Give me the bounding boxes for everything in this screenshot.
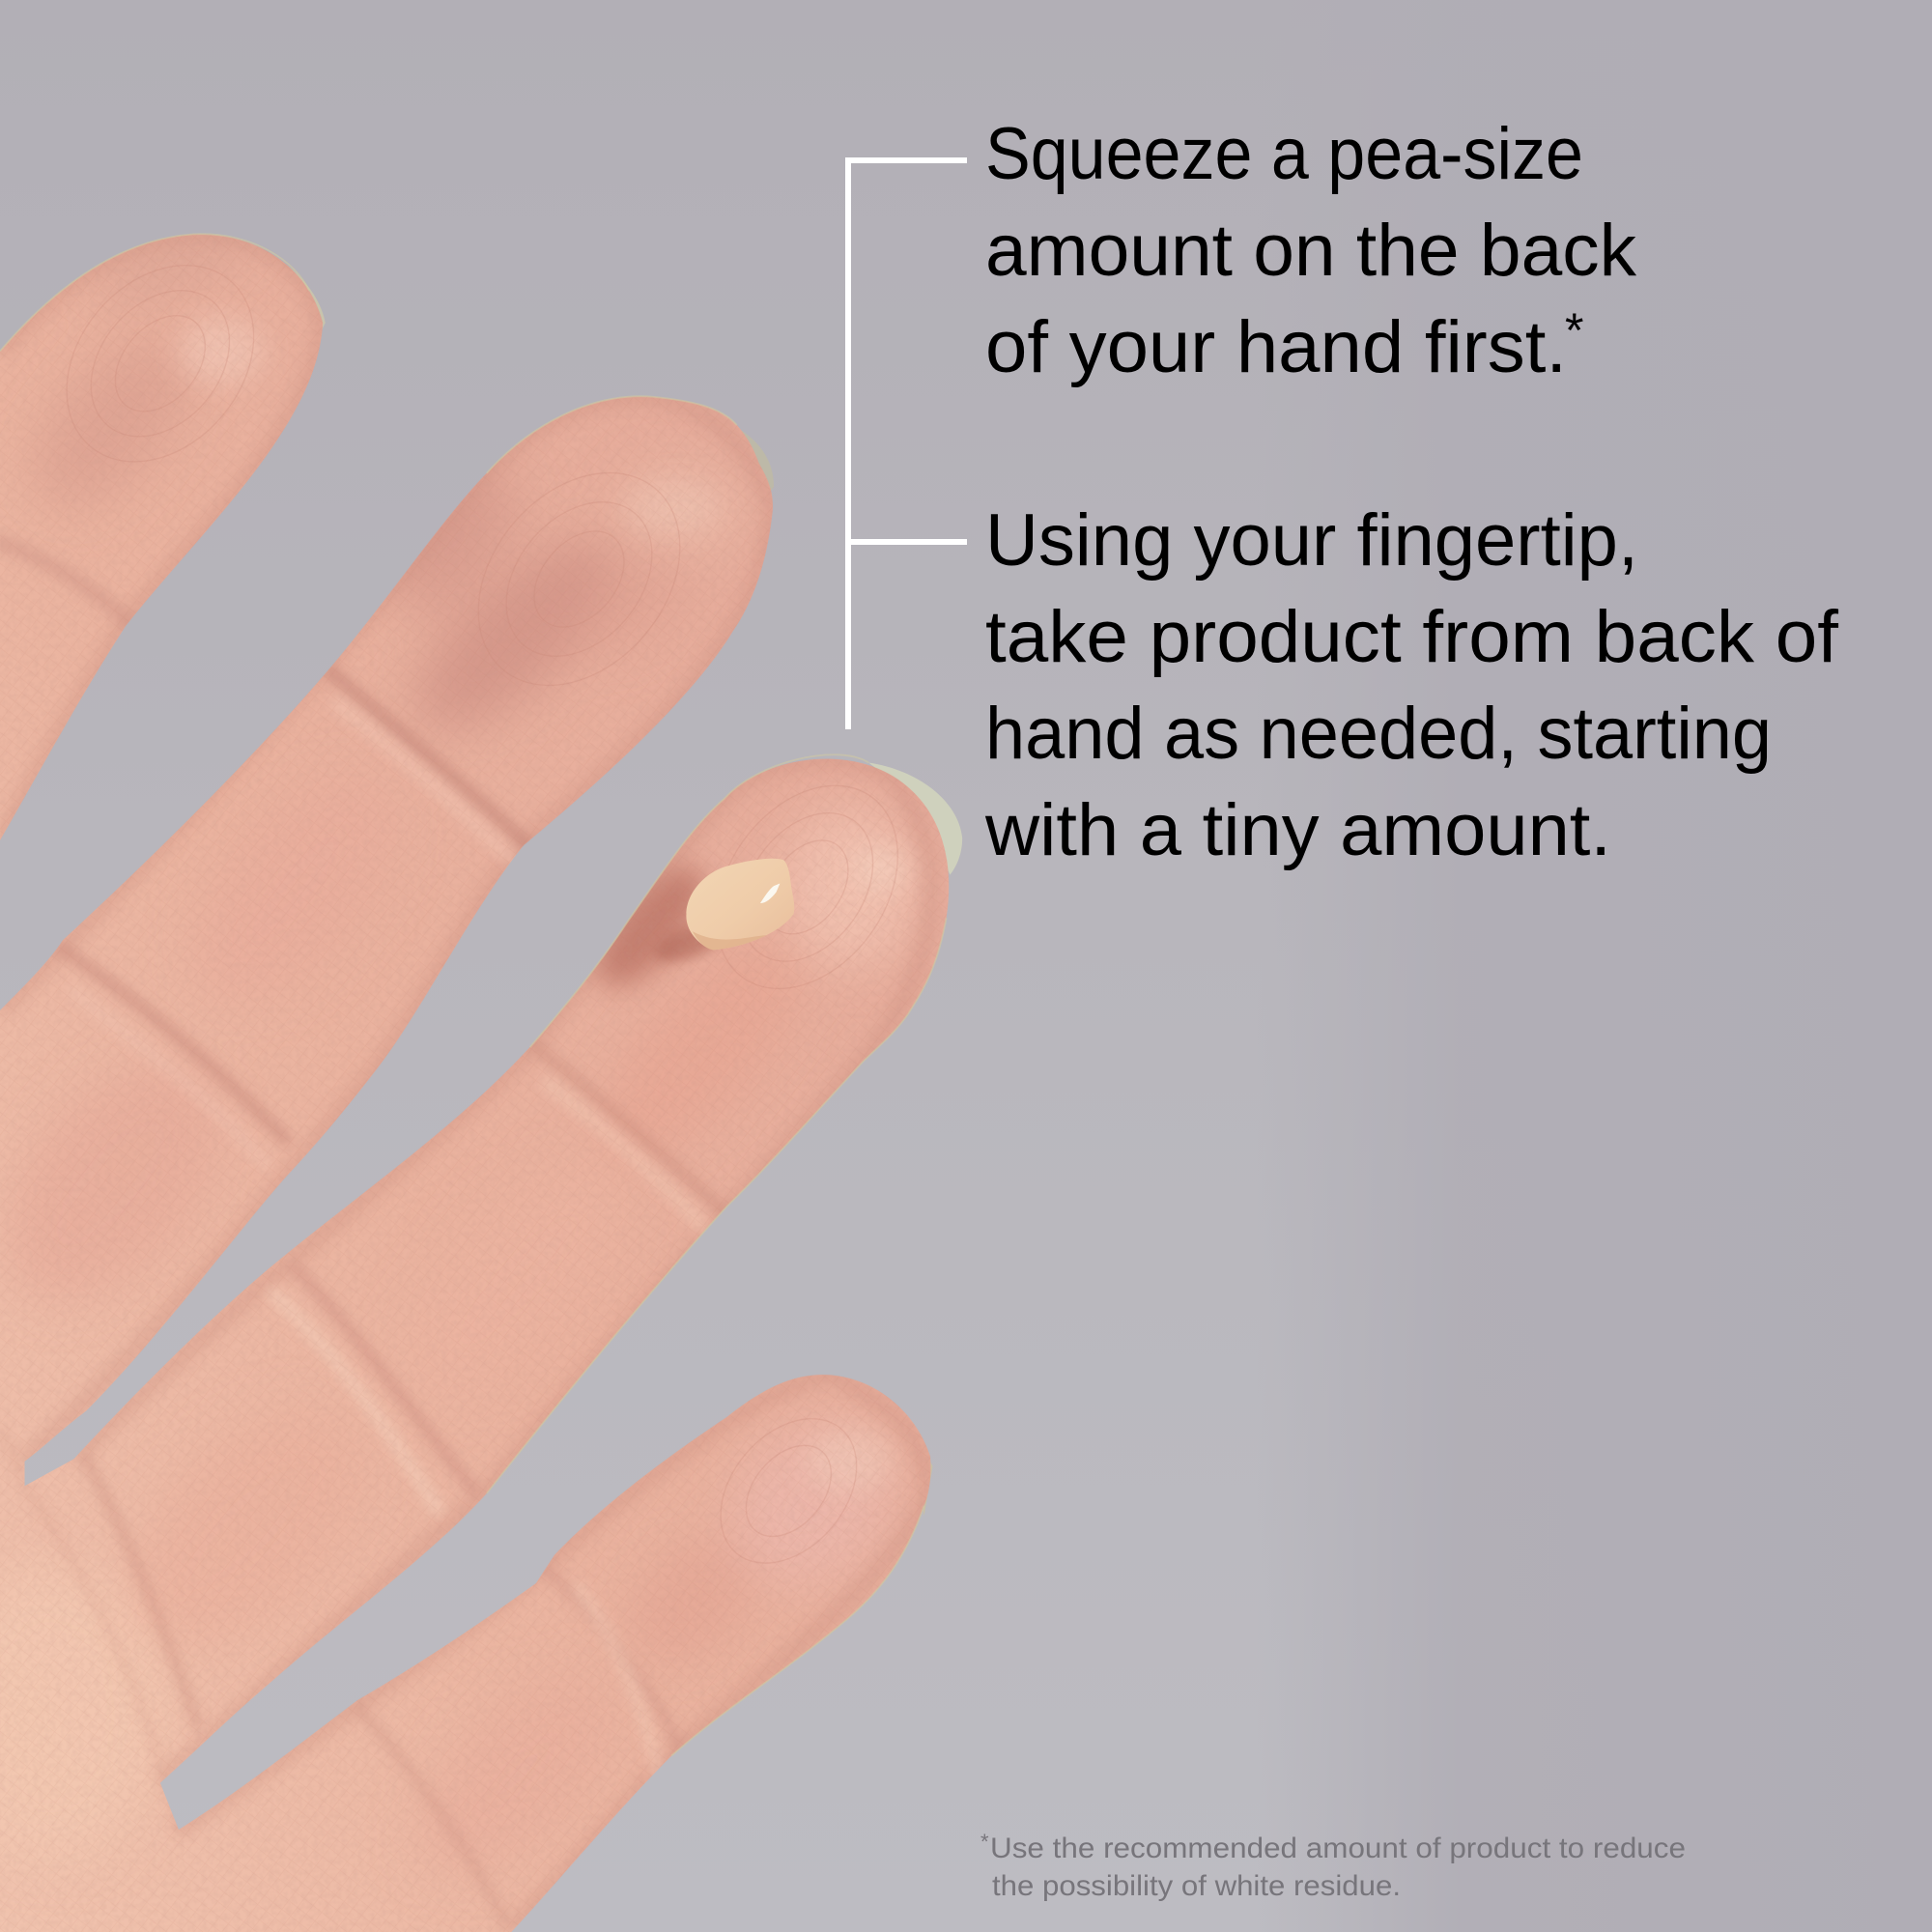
footnote: the possibility of white residue. <box>992 1870 1401 1902</box>
text block: step one <box>985 113 1637 388</box>
outline rim light <box>0 234 947 1756</box>
icon: fingernails <box>265 252 962 1516</box>
footnote: * <box>980 1830 989 1854</box>
shading: contact shadow under product <box>591 858 717 998</box>
footnote <box>980 1830 1686 1902</box>
text block: step one: * <box>1565 303 1583 357</box>
shading: skin creases pattern <box>4 856 891 1930</box>
photo: hand with product on fingertip <box>0 234 962 1932</box>
text block: step one: amount on the back <box>985 210 1637 292</box>
text block: step two <box>984 499 1839 871</box>
shading: skin highlights <box>179 317 908 1491</box>
text block: step one: of your hand first. <box>985 306 1567 388</box>
shading: joint creases <box>0 542 727 1922</box>
text block: step one: Squeeze a pea-size <box>985 113 1583 195</box>
text block: step two: hand as needed, starting <box>985 693 1772 775</box>
fingers and palm <box>0 234 949 1932</box>
product droplet <box>686 859 794 950</box>
shading: finger edges <box>0 234 930 1932</box>
shading: finger tone blobs <box>17 259 920 1760</box>
shading: skin texture <box>45 1737 46 1739</box>
footnote: Use the recommended amount of product to reduce <box>990 1833 1686 1864</box>
text block: step two: take product from back of <box>985 596 1839 678</box>
text block: step two: with a tiny amount. <box>984 789 1611 871</box>
bracket connector lines <box>845 157 967 729</box>
text block: step two: Using your fingertip, <box>985 499 1638 582</box>
shading: fingerprint ridges <box>66 265 898 1563</box>
